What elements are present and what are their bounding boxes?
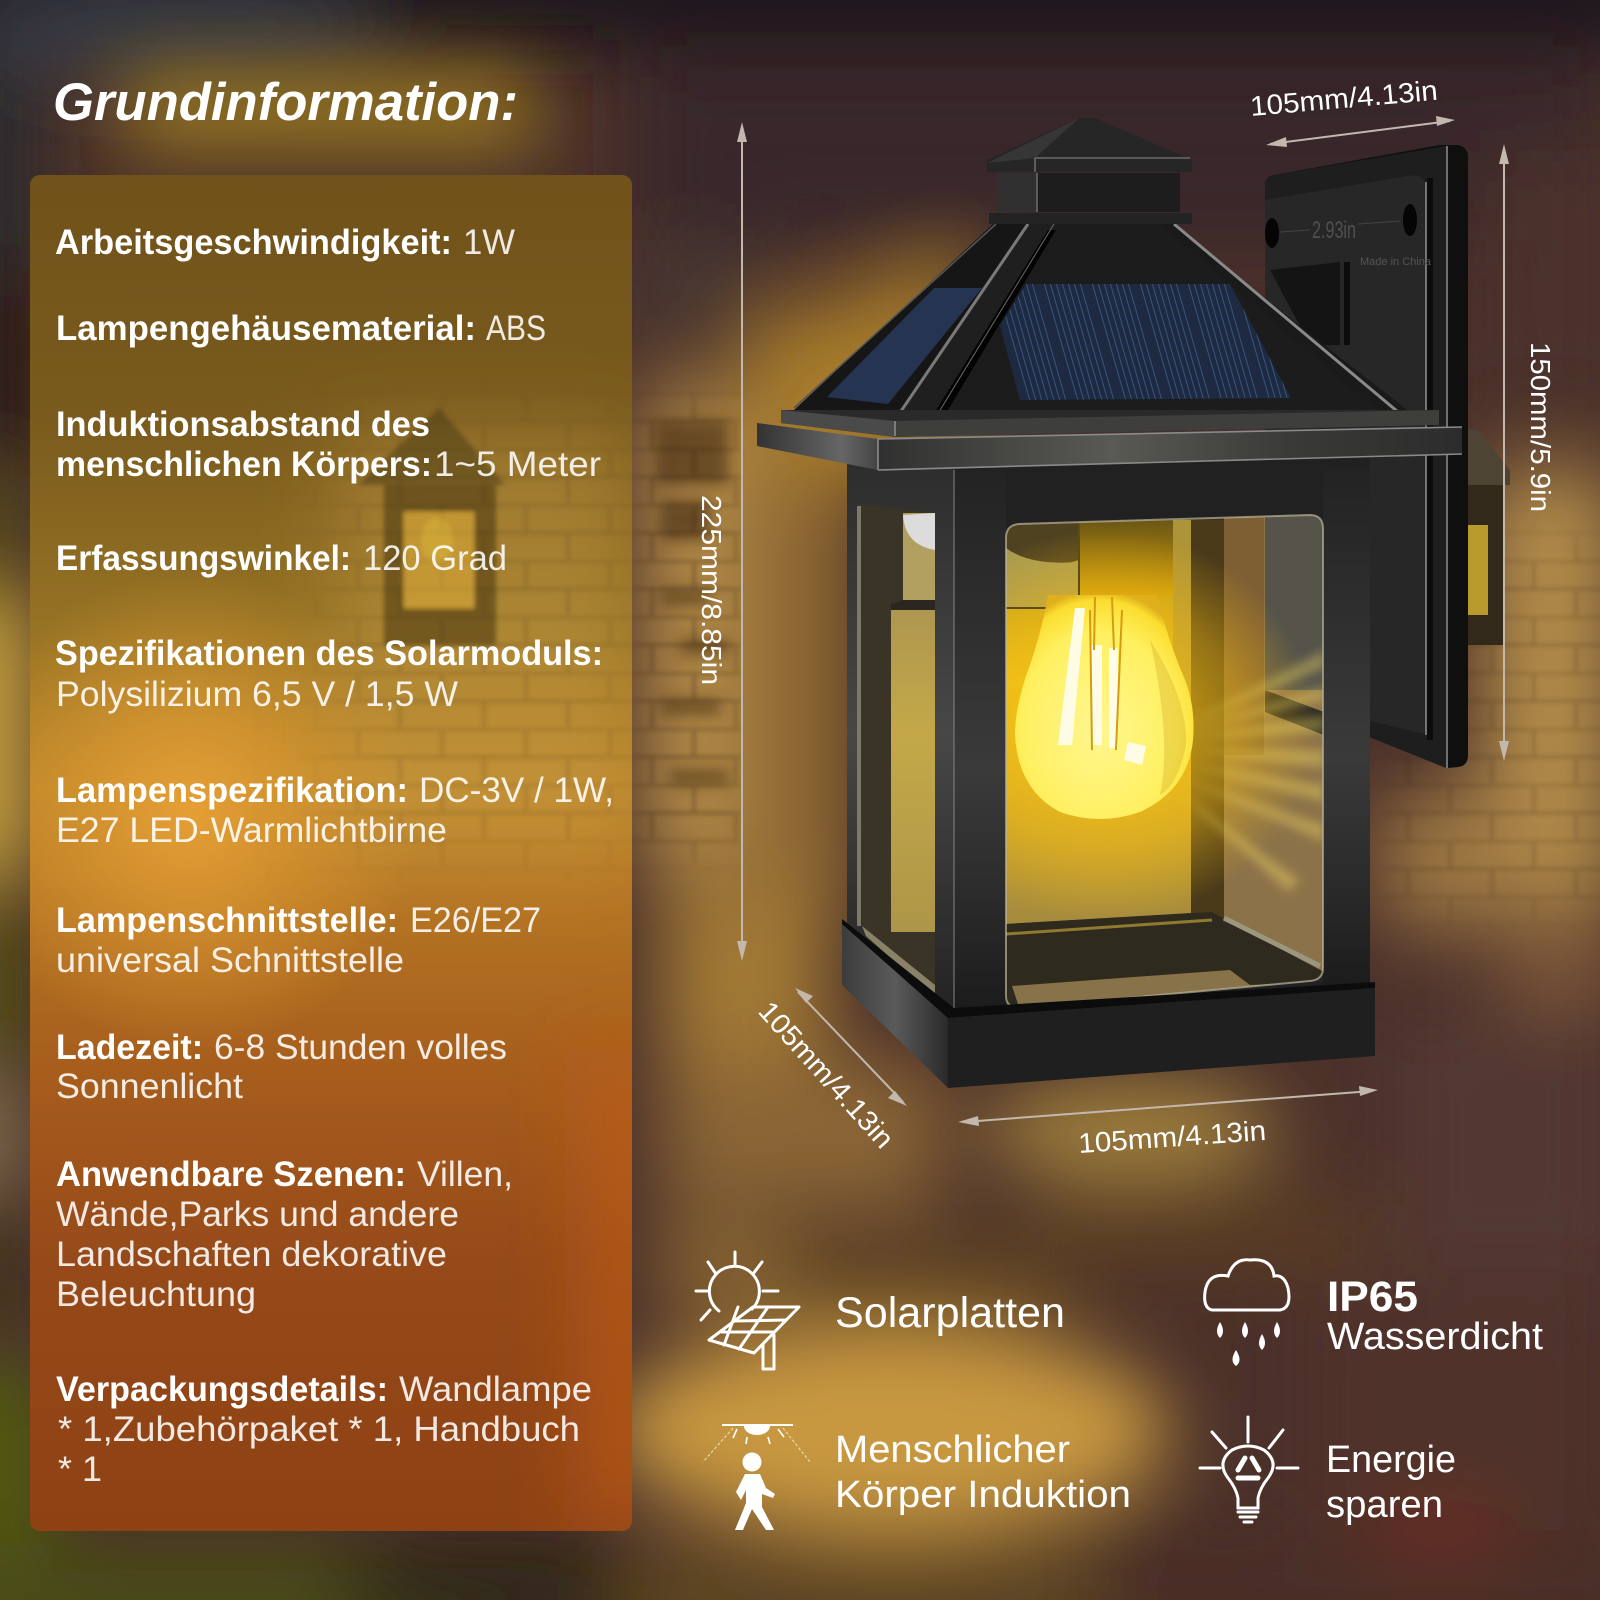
spec: Lampenspezifikation (56, 771, 614, 850)
label: Menschlicher (835, 1429, 1070, 1471)
spec: Lampenschnittstelle: Lampenschnittstelle: (56, 901, 398, 940)
spec: Lampenspezifikation: E27 LED-Warmlichtbirne (56, 811, 447, 850)
background brick wall texture (632, 340, 1600, 940)
dimension: height 225mm (696, 122, 747, 961)
spec: Induktionsabstand: Induktionsabstand des (56, 405, 430, 444)
spec: Lampengehäusematerial: ABS (486, 309, 546, 348)
spec: Lampengehäusematerial: Lampengehäusematerial: (56, 309, 476, 348)
spec: Anwendbare Szenen: Anwendbare Szenen: (56, 1155, 406, 1194)
feature: IP65 waterproof (1205, 1260, 1543, 1366)
spec: Lampenspezifikation: DC-3V / 1W, (419, 771, 614, 810)
spec: Verpackungsdetails: Wandlampe (399, 1370, 592, 1409)
spec: Erfassungswinkel: 120 Grad (363, 539, 507, 578)
label: Solarplatten (835, 1289, 1065, 1337)
icon: recycling light bulb (1200, 1417, 1298, 1522)
feature: human body induction: Körper Induktion (835, 1474, 1131, 1516)
feature: energy saving (1200, 1417, 1456, 1526)
front window (1005, 514, 1324, 1005)
feature: energy saving: sparen (1326, 1484, 1443, 1526)
panel: specifications (0, 175, 660, 1531)
spec: Solarmodul (55, 634, 603, 714)
spec: Erfassungswinkel (56, 539, 507, 578)
lamp body (847, 455, 1370, 1015)
lamp product (757, 118, 1468, 1088)
mounting plate (1265, 145, 1468, 768)
title glow (120, 70, 540, 150)
roof eave (757, 410, 1462, 470)
feature: IP65 waterproof: Wasserdicht (1327, 1316, 1543, 1358)
left side window (859, 504, 935, 997)
spec: Lampenschnittstelle: E26/E27 (410, 901, 541, 940)
spec: Verpackungsdetails (56, 1370, 592, 1489)
spec: Verpackungsdetails: * 1,Zubehörpaket * 1, Handbuch (58, 1410, 580, 1449)
spec: Arbeitsgeschwindigkeit: 1W (463, 223, 515, 262)
dimension: lamp width 105mm: 105mm/4.13in (1077, 1115, 1267, 1159)
reflected lamp at right (1468, 430, 1510, 645)
spec: Induktionsabstand: 1~5 Meter (434, 445, 601, 484)
spec: Lampenschnittstelle: universal Schnittstelle (56, 941, 404, 980)
icon: sun and solar panel (696, 1252, 799, 1369)
label: IP65 (1327, 1273, 1418, 1321)
spec: Anwendbare Szenen: Beleuchtung (56, 1275, 256, 1314)
spec: Ladezeit: Ladezeit: (56, 1028, 203, 1067)
dimension: lamp depth 105mm: 105mm/4.13in (753, 995, 900, 1154)
roof (781, 224, 1420, 420)
glowing bulb (1015, 595, 1194, 819)
feature: solar panels (696, 1252, 1065, 1369)
light rays (1196, 648, 1323, 893)
label: Energie (1326, 1439, 1456, 1481)
spec: Anwendbare Szenen: Villen, (417, 1155, 513, 1194)
spec: Induktionsabstand: menschlichen Körpers: (56, 445, 432, 484)
spec: Solarmodul: Polysilizium 6,5 V / 1,5 W (56, 675, 458, 714)
mounting plate: 2.93in (1312, 217, 1356, 244)
spec: Lampenspezifikation: Lampenspezifikation: (56, 771, 408, 810)
dimension: height 225mm: 225mm/8.85in (696, 495, 727, 685)
spec: Ladezeit: 6-8 Stunden volles (214, 1028, 507, 1067)
spec: Erfassungswinkel: Erfassungswinkel: (56, 539, 351, 578)
glow (1007, 540, 1307, 902)
spec: Solarmodul: Spezifikationen des Solarmoduls: (55, 634, 603, 673)
spec: Ladezeit: Sonnenlicht (56, 1067, 243, 1106)
reflected lamp in panel (358, 408, 505, 645)
icon: rain cloud (1205, 1260, 1289, 1366)
spec: Verpackungsdetails: Verpackungsdetails: (56, 1370, 388, 1409)
title: Grundinformation: (53, 73, 518, 132)
dimension: lamp width 105mm (958, 1086, 1378, 1159)
dimension: plate width 105mm (1249, 75, 1455, 147)
feature: human body induction (703, 1425, 1131, 1530)
spec: Verpackungsdetails: * 1 (58, 1450, 102, 1489)
mounting plate: Made in China (1360, 256, 1432, 268)
spec: Lampenschnittstelle (56, 901, 541, 980)
lamp base (842, 919, 1375, 1088)
finial cap (987, 118, 1192, 224)
spec: Anwendbare Szenen: Wände,Parks und andere (56, 1195, 459, 1234)
spec: Induktionsabstand (56, 405, 601, 484)
dimension: plate height 150mm (1499, 144, 1556, 761)
spec: Anwendbare Szenen (56, 1155, 513, 1314)
icon: walking person below sensor (703, 1425, 810, 1530)
spec: Ladezeit (56, 1028, 507, 1106)
dimension: plate width 105mm: 105mm/4.13in (1249, 75, 1439, 122)
spec: Anwendbare Szenen: Landschaften dekorative (56, 1235, 447, 1274)
dimension: plate height 150mm: 150mm/5.9in (1525, 342, 1556, 512)
spec: Arbeitsgeschwindigkeit: Arbeitsgeschwindigkeit: (55, 223, 452, 262)
solar panel: left (827, 288, 982, 404)
solar panel: front (1000, 284, 1291, 400)
